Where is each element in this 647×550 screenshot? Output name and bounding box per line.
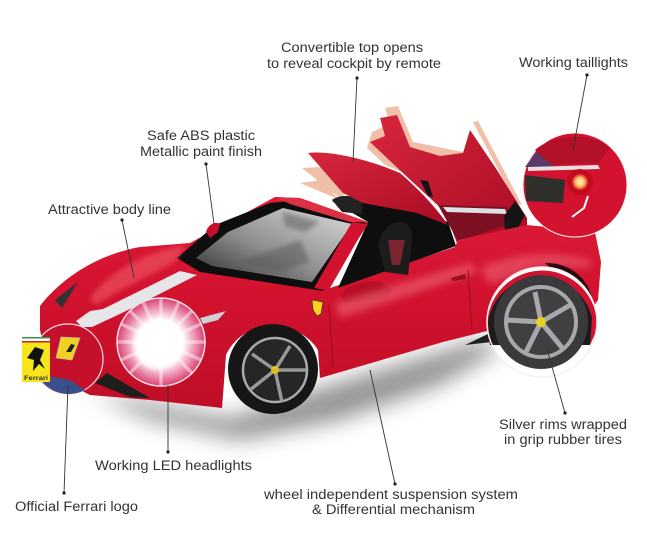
deck inner details [438, 205, 510, 241]
windshield [196, 208, 352, 282]
mirror [206, 223, 220, 238]
label: LED headlights: Working LED headlights [95, 458, 252, 473]
car [40, 106, 601, 414]
side vent [200, 311, 226, 324]
label: Ferrari logo: Official Ferrari logo [15, 499, 138, 514]
folded top panel [308, 152, 448, 225]
label: suspension: wheel independent suspension system [263, 487, 518, 502]
nose vent [55, 282, 78, 308]
label: suspension: & Differential mechanism [312, 502, 475, 517]
ground shadow [90, 340, 500, 440]
label: ABS plastic: Metallic paint finish [140, 144, 262, 159]
side highlights [335, 263, 478, 318]
circle: silver rims [487, 267, 597, 377]
label: body line: Attractive body line [48, 202, 171, 217]
circle: taillight [523, 133, 627, 237]
windshield reflections [240, 212, 320, 272]
circle: logo [33, 324, 103, 394]
door handle [451, 274, 466, 281]
door lines [329, 270, 472, 368]
rear wheel arch shadow [545, 263, 592, 300]
hood highlight [90, 246, 185, 305]
front wheel [228, 324, 318, 414]
label: convertible top [267, 40, 441, 71]
label: silver rims [499, 417, 627, 447]
leader lines [62, 73, 589, 495]
main body [40, 197, 601, 408]
seat [378, 222, 412, 275]
label: ABS plastic: Safe ABS plastic [147, 128, 255, 143]
yellow badge [22, 337, 50, 382]
label: ABS plastic [140, 128, 262, 159]
cockpit [332, 198, 456, 288]
label: convertible top: Convertible top opens [281, 40, 423, 55]
side shield badge [312, 300, 323, 316]
front grille [95, 373, 150, 398]
hood white stripe [76, 271, 197, 327]
open rear deck [370, 115, 527, 243]
label: silver rims: Silver rims wrapped [499, 417, 627, 432]
convertible top ghost positions [300, 106, 522, 205]
label: suspension [263, 487, 518, 517]
windshield frame [177, 200, 368, 291]
under tray [465, 333, 492, 345]
yellow badge: Ferrari [24, 376, 48, 382]
label: silver rims: in grip rubber tires [504, 432, 622, 447]
red A pillar [314, 222, 368, 290]
circle: headlight [117, 298, 205, 386]
label: convertible top: to reveal cockpit by remote [267, 56, 441, 71]
label: working taillights: Working taillights [519, 55, 628, 70]
